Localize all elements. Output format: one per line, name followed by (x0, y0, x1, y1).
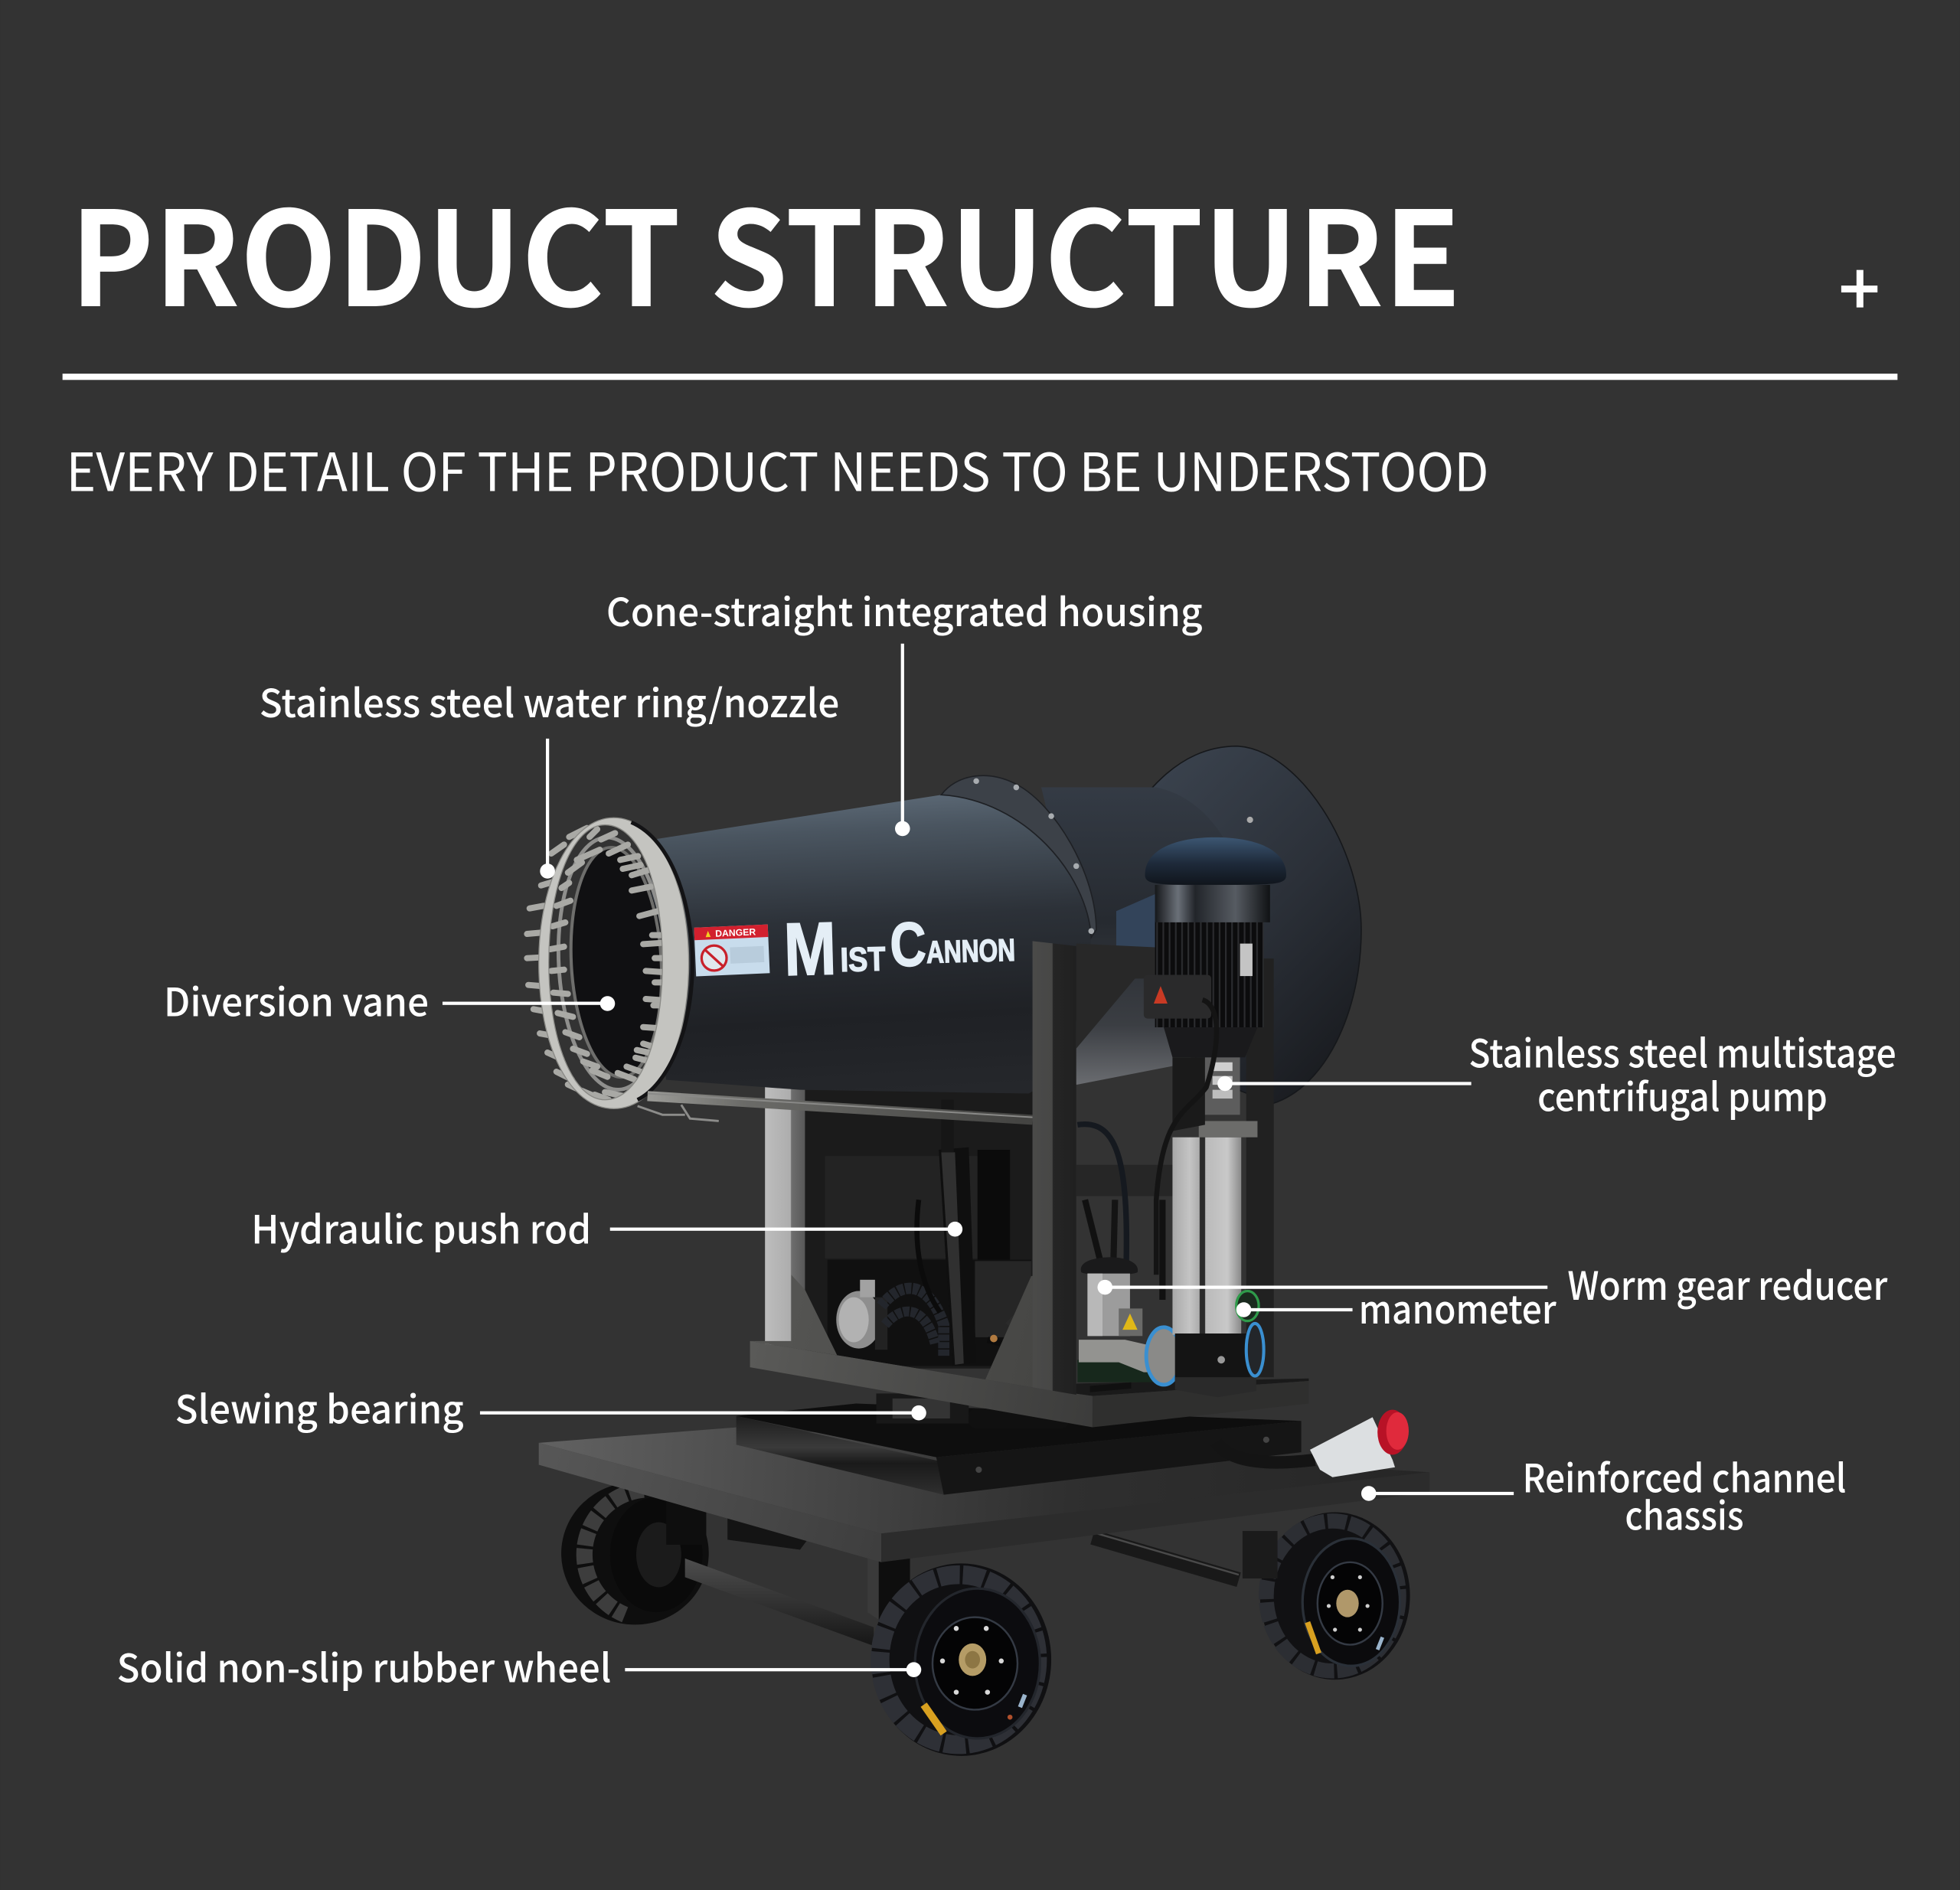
rear left wheel (561, 1482, 709, 1624)
callout: stainless steel water ring/nozzle: Stainless steel water ring/nozzle (260, 672, 839, 729)
dark nozzle opening (565, 847, 670, 1079)
nozzle water ring (527, 818, 692, 1108)
brand logo (782, 901, 1016, 991)
hoses behind pump (1077, 1125, 1162, 1300)
hoses and small motor (836, 1200, 1033, 1356)
power cable and industrial plug (1217, 1410, 1409, 1477)
callout: manometer (1236, 1278, 1557, 1335)
electric motor (1144, 837, 1286, 1275)
title: PRODUCT STRUCTURE (70, 155, 1462, 344)
worm gear reducer (1077, 1257, 1181, 1385)
icon: plus sign (1841, 270, 1877, 308)
support pipe (638, 1094, 1033, 1121)
stainless multistage pump column (1164, 1027, 1264, 1397)
rear right post (1246, 958, 1274, 1377)
nozzles (527, 828, 664, 1100)
brand logo: IST (840, 940, 886, 979)
warning sticker (694, 925, 769, 976)
cross beam (1076, 1165, 1172, 1196)
subtitle: EVERY DETAIL OF THE PRODUCT NEEDS TO BE UNDERSTOOD (67, 430, 1488, 507)
callout: hydraulic push rod: Hydraulic push rod (251, 1198, 591, 1255)
front frame post (1033, 941, 1076, 1395)
callout: reinforced channel chassis (1361, 1447, 1846, 1541)
stainless rear post (765, 1085, 806, 1345)
main cone-straight housing (651, 795, 1091, 1094)
axles and supports (666, 1500, 1278, 1646)
flange ring (941, 775, 1096, 937)
rear cylinder (1041, 788, 1250, 1085)
callout: slewing bearing (175, 1379, 926, 1435)
channel steel frame (737, 1403, 1302, 1495)
callout: manometer: manometer (1359, 1278, 1557, 1335)
callout: cone-straight integrated housing (606, 581, 1203, 836)
callout: stainless steel multistage centrifugal pump: Stainless steel multistage (1468, 1022, 1896, 1079)
callout: stainless steel multistage centrifugal pump (1217, 1022, 1896, 1122)
callout: solid non-slip rubber wheel: Solid non-slip rubber wheel (117, 1637, 611, 1694)
base plate (750, 1341, 1308, 1427)
lower frame plate (750, 1275, 1047, 1389)
rear fan disc (1152, 746, 1361, 1104)
callout: slewing bearing: Slewing bearing (175, 1379, 464, 1435)
green pressure gauge (1236, 1291, 1259, 1321)
warning sticker: DANGER (715, 926, 756, 939)
inner black panel (805, 1087, 1033, 1369)
rear right wheel (1260, 1512, 1410, 1679)
callout: worm gear reducer: Worm gear reducer (1567, 1255, 1888, 1311)
brand logo: C (889, 909, 927, 980)
callout: diversion vane (164, 971, 615, 1027)
slewing bearing (876, 1393, 1069, 1428)
hydraulic push rod (939, 1100, 976, 1366)
brand logo: ANNON (926, 932, 1016, 970)
frame bracket (1076, 944, 1155, 1049)
callout: cone-straight integrated housing: Cone-straight integrated housing (606, 581, 1203, 638)
callout: stainless steel water ring/nozzle (260, 672, 839, 879)
callout: worm gear reducer (1097, 1255, 1888, 1311)
brand logo: M (782, 906, 838, 991)
callout: reinforced channel chassis: Reinforced channel (1523, 1447, 1846, 1503)
ring to body dark rim (631, 822, 692, 1100)
product illustration: mist cannon machine (527, 746, 1429, 1756)
stainless outer ring (539, 818, 689, 1108)
front wheel (871, 1563, 1051, 1756)
callout: stainless steel multistage centrifugal pump: centrifugal pump (1537, 1066, 1828, 1122)
callout: diversion vane: Diversion vane (164, 971, 429, 1027)
blue motor bracket (1116, 893, 1156, 948)
callout: reinforced channel chassis: chassis (1625, 1484, 1744, 1541)
callout: solid non-slip rubber wheel (117, 1637, 921, 1694)
callout: hydraulic push rod (251, 1198, 962, 1255)
platform chassis (539, 1427, 1429, 1562)
